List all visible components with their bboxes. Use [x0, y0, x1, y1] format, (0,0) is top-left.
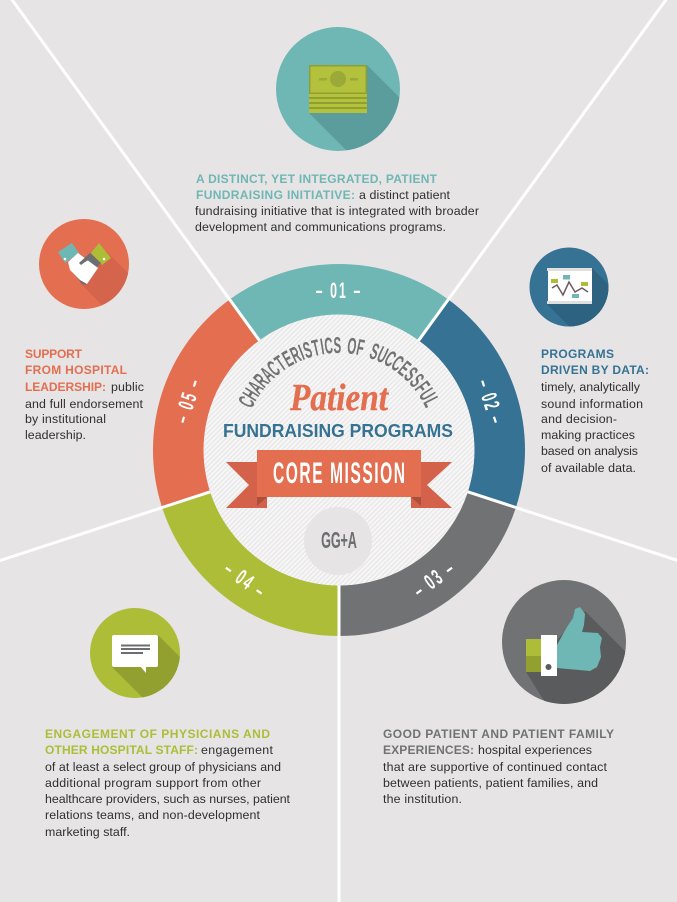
- curved heading: T: [271, 351, 291, 376]
- text: experiences 03: [383, 727, 614, 806]
- icon: handshake: [39, 219, 129, 309]
- text: leadership 05: FROM HOSPITAL: [25, 363, 127, 377]
- curved heading: U: [414, 384, 440, 405]
- curved heading: [234, 333, 444, 411]
- text: data 02: timely, analytically: [541, 380, 641, 394]
- text: initiative 01: development and communications programs.: [195, 220, 446, 234]
- text: experiences 03: that are supportive of continued contact: [383, 760, 608, 774]
- text: data 02: based on analysis: [541, 444, 638, 458]
- curved heading: S: [405, 369, 429, 392]
- text: engagement 04: engagement: [201, 743, 274, 757]
- text: experiences 03: hospital experiences: [478, 743, 592, 757]
- text: data 02: of available data.: [541, 461, 636, 475]
- ring segment 05: [153, 300, 260, 508]
- curved heading: C: [323, 333, 334, 359]
- ring segment 02: [418, 300, 525, 508]
- ring segment 03: [339, 492, 516, 636]
- text: leadership 05: SUPPORT: [25, 347, 83, 361]
- icon: money stack: [276, 27, 400, 151]
- curved heading: E: [278, 346, 297, 372]
- curved heading: S: [399, 363, 422, 386]
- curved heading: O: [346, 333, 358, 359]
- text: leadership 05: leadership.: [25, 428, 86, 442]
- ring segment 04: [162, 492, 339, 636]
- text: experiences 03: GOOD PATIENT AND PATIENT FAMILY: [383, 727, 614, 741]
- curved heading: A: [243, 376, 268, 398]
- curved heading: I: [295, 340, 308, 365]
- text: initiative 01: a distinct patient: [359, 188, 451, 202]
- text: experiences 03: EXPERIENCES:: [383, 743, 474, 757]
- logo badge: [304, 507, 372, 575]
- number 05: – 05 –: [169, 376, 206, 426]
- number 03: – 03 –: [408, 556, 459, 603]
- text: data 02: sound information: [541, 397, 643, 411]
- text: initiative 01: A DISTINCT, YET INTEGRATED, PATIENT: [196, 172, 438, 186]
- logo badge: GG+A: [321, 527, 357, 553]
- curved heading: I: [319, 334, 326, 360]
- text: experiences 03: between patients, patient families, and: [383, 776, 598, 790]
- curved heading: H: [238, 384, 264, 405]
- text: leadership 05: [25, 347, 144, 442]
- ribbon banner: CORE MISSION: [273, 457, 405, 491]
- text: leadership 05: by institutional: [25, 412, 106, 426]
- curved heading: E: [393, 356, 415, 381]
- text: engagement 04: OTHER HOSPITAL STAFF:: [45, 743, 198, 757]
- text: engagement 04: healthcare providers, such as nurses, patient: [45, 792, 291, 806]
- heading: Patient: Patient: [289, 377, 389, 419]
- ring segment 01: [230, 264, 448, 341]
- curved heading: A: [255, 362, 279, 386]
- number 04: – 04 –: [219, 556, 270, 603]
- text: engagement 04: additional program support from other: [45, 776, 261, 790]
- text: data 02: [541, 347, 649, 475]
- number 01: – 01 –: [316, 278, 360, 303]
- text: data 02: DRIVEN BY DATA:: [541, 363, 649, 377]
- curved heading: U: [373, 342, 392, 368]
- curved heading: R: [286, 342, 305, 368]
- text: initiative 01: fundraising initiative that is integrated with broader: [195, 204, 479, 218]
- text: experiences 03: the institution.: [383, 792, 462, 806]
- text: data 02: and decision-: [541, 412, 617, 426]
- icon: presentation chart: [530, 248, 608, 326]
- curved heading: R: [249, 369, 273, 392]
- icon: speech bubble: [90, 608, 180, 698]
- curved heading: F: [410, 377, 434, 398]
- text: engagement 04: relations teams, and non-development: [45, 808, 261, 822]
- circular diagram: [153, 264, 525, 636]
- text: engagement 04: ENGAGEMENT OF PHYSICIANS AND: [45, 727, 270, 741]
- text: leadership 05: and full endorsement: [25, 397, 144, 411]
- text: engagement 04: of at least a select group of physicians and: [45, 760, 281, 774]
- text: initiative 01: FUNDRAISING INITIATIVE:: [196, 188, 355, 202]
- icon: thumbs up: [502, 580, 626, 704]
- text: initiative 01: [195, 172, 479, 234]
- hatched center disk: [204, 314, 474, 586]
- text: leadership 05: public: [111, 380, 144, 394]
- curved heading: C: [380, 346, 400, 372]
- curved heading: L: [418, 393, 444, 411]
- heading: Fundraising Programs: FUNDRAISING PROGRAMS: [223, 421, 453, 441]
- text: data 02: PROGRAMS: [541, 347, 614, 361]
- curved heading: F: [354, 335, 366, 361]
- curved heading: C: [234, 392, 260, 411]
- curved heading: S: [367, 338, 382, 365]
- curved heading: S: [333, 333, 341, 358]
- curved heading: S: [300, 337, 315, 364]
- text: engagement 04: [45, 727, 291, 839]
- number 02: – 02 –: [472, 376, 509, 426]
- text: engagement 04: marketing staff.: [45, 825, 130, 839]
- curved heading: T: [310, 335, 322, 361]
- curved heading: C: [387, 351, 408, 376]
- ribbon banner: [226, 450, 452, 508]
- text: leadership 05: LEADERSHIP:: [25, 380, 106, 394]
- curved heading: C: [262, 356, 285, 381]
- text: data 02: making practices: [541, 428, 635, 442]
